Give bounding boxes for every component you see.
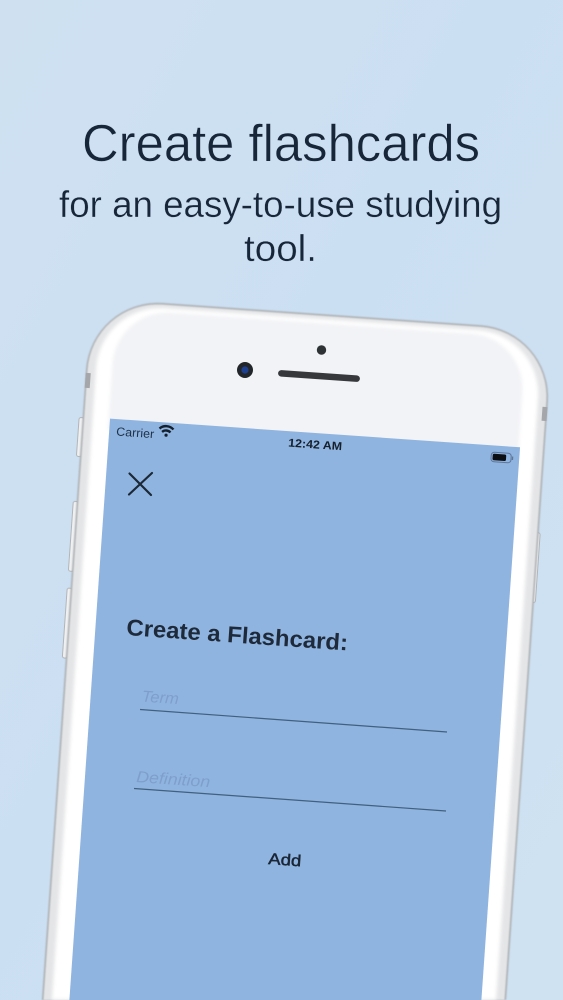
proximity sensor: [317, 345, 326, 355]
screen: [69, 419, 520, 1000]
speaker: [278, 370, 360, 382]
subtitle: tool.: [244, 227, 317, 269]
icon: battery: [491, 452, 514, 463]
definition placeholder: Definition: [136, 769, 211, 791]
definition field: [134, 769, 446, 811]
subtitle: [59, 183, 502, 269]
status bar time: 12:42 AM: [288, 438, 342, 453]
phone body: [38, 298, 554, 1000]
antenna bands: [85, 373, 548, 421]
frame inner band: [43, 300, 551, 1000]
front camera: [237, 362, 253, 378]
term placeholder: Term: [141, 689, 179, 708]
icon: close: [129, 473, 152, 495]
left side buttons: [62, 417, 84, 658]
subtitle: for an easy-to-use studying: [59, 183, 502, 225]
white bezel: [52, 304, 543, 1000]
phone face: [108, 309, 526, 458]
right side button: [531, 533, 540, 603]
form heading: Create a Flashcard:: [126, 614, 349, 655]
status bar carrier: Carrier: [116, 425, 155, 441]
add button: Add: [268, 851, 302, 870]
title: Create flashcards: [82, 115, 480, 173]
icon: wifi: [159, 426, 174, 437]
phone mockup: [38, 298, 554, 1000]
term field: [140, 689, 447, 732]
phone frame: [42, 298, 553, 1000]
